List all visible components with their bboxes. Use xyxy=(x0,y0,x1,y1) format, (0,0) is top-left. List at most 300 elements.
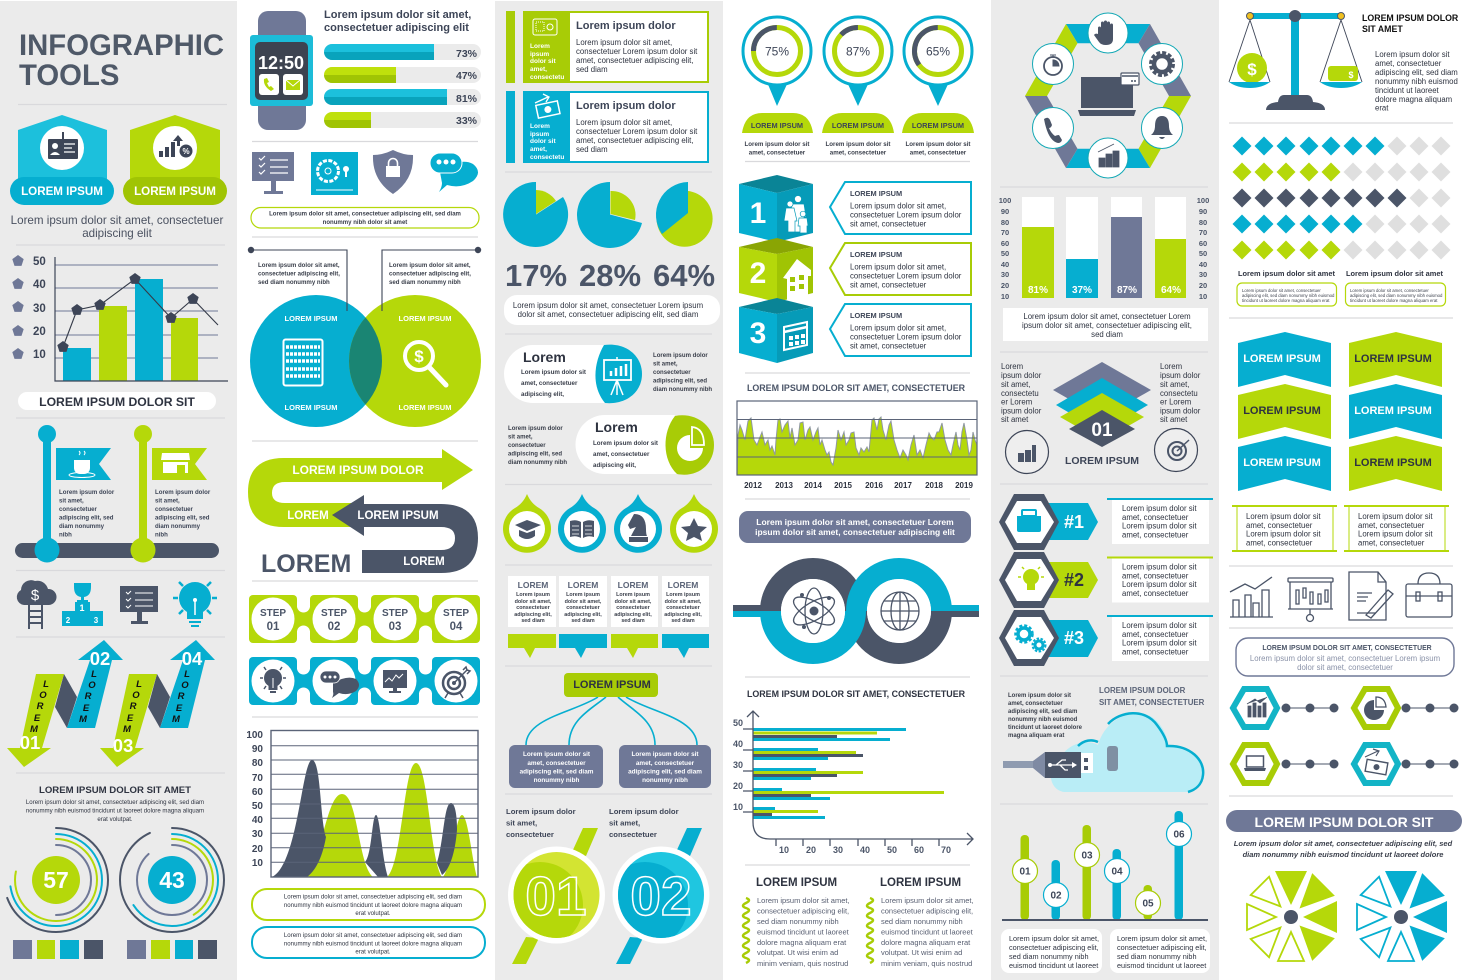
hex node: pie xyxy=(1354,689,1458,727)
hex label 1: amet, consectetuer xyxy=(1122,513,1189,522)
venn diagram: LOREM IPSUM xyxy=(285,403,337,412)
balance scale: $ xyxy=(1348,70,1354,80)
callout 3: sit amet, consectetuer xyxy=(850,342,927,350)
card green xyxy=(506,11,708,83)
callout 2: LOREM IPSUM xyxy=(850,250,902,259)
note cyan: nonummy nibh euismod tincidunt ut laoreet dolore magna aliquam xyxy=(284,940,462,948)
caption: Lorem ipsum dolor sit amet, consectetuer xyxy=(11,214,223,227)
hex label 2: amet, consectetuer xyxy=(1122,572,1189,580)
card cyan: ipsum xyxy=(530,131,549,138)
infinity rings xyxy=(733,568,979,654)
hex label 3: amet, consectetuer xyxy=(1122,630,1189,639)
progress bars: 47% xyxy=(456,70,478,82)
arrows: zigzag steps one and two: L xyxy=(43,679,49,690)
timeline: adipiscing elit, sed xyxy=(155,514,210,522)
text column left xyxy=(743,877,850,968)
balance scale xyxy=(1229,10,1362,110)
note green: Lorem ipsum dolor sit amet, consectetuer adipiscing elit, sed diam xyxy=(284,894,462,900)
step row: 04 xyxy=(450,621,463,633)
text cards: consectetuer xyxy=(566,605,601,611)
column chart: 20 xyxy=(1001,281,1009,290)
layered diamond: consectetu xyxy=(1001,389,1039,398)
title: INFOGRAPHIC xyxy=(19,29,224,62)
column chart: 64% xyxy=(1161,285,1181,296)
timeseries chart: 2018 xyxy=(925,481,943,490)
card green: amet, xyxy=(530,66,547,73)
timeline: consectetuer xyxy=(155,506,194,513)
badge: green growth: LOREM IPSUM xyxy=(134,185,216,198)
column chart: 80 xyxy=(1199,218,1207,227)
text cards: Lorem ipsum xyxy=(566,592,600,598)
text cards: sed diam xyxy=(571,618,595,624)
card green: Lorem ipsum dolor sit amet, xyxy=(576,38,672,47)
text column right: LOREM IPSUM xyxy=(880,877,961,889)
grid notes: adipiscing elit, sed diam nonummy nibh euismod xyxy=(1350,293,1443,298)
horizontal bar chart: 30 xyxy=(733,760,743,770)
callout 2: sit amet, consectetuer xyxy=(850,280,927,290)
title: TOOLS xyxy=(19,59,119,92)
grid notes: adipiscing elit, sed diam nonummy nibh euismod xyxy=(1242,293,1335,298)
timeline: Lorem ipsum dolor xyxy=(59,489,115,496)
scale text: Lorem ipsum dolor sit xyxy=(1375,50,1450,59)
org chart: amet, consectetuer xyxy=(527,760,586,767)
timeline: nibh xyxy=(155,532,168,538)
arrows: zigzag steps three and four: M xyxy=(172,714,181,725)
callout 2 xyxy=(830,243,971,295)
lorem block pie xyxy=(508,415,714,475)
horizontal bar chart: 50 xyxy=(733,718,743,728)
slate banner: Lorem ipsum dolor sit amet, consectetuer Lorem xyxy=(756,517,954,527)
layered diamond: ipsum dolor xyxy=(1001,371,1042,380)
column chart: 37% xyxy=(1072,285,1092,296)
cloud usb: amet, consectetuer xyxy=(1008,701,1063,707)
text cards: LOREM xyxy=(568,580,598,590)
layered diamond: Lorem xyxy=(1160,362,1182,371)
card cyan: Lorem ipsum dolor sit amet, xyxy=(576,118,672,127)
pin 75: LOREM IPSUM xyxy=(751,121,803,130)
ribbon tags xyxy=(1238,332,1442,491)
timeline: diam nonummy xyxy=(155,523,201,530)
text cards: Lorem ipsum xyxy=(516,592,550,598)
callout 1 xyxy=(830,182,971,234)
hex label 1: amet, consectetuer xyxy=(1122,530,1189,540)
layered diamond xyxy=(1001,362,1201,474)
timeseries chart xyxy=(737,401,977,490)
progress heading: Lorem ipsum dolor sit amet, xyxy=(324,9,471,21)
hex label 1: #1 xyxy=(1064,512,1084,532)
badge 02: Lorem ipsum dolor xyxy=(609,807,679,816)
text cards: adipiscing elit, xyxy=(664,612,702,618)
framed note right: amet, consectetuer xyxy=(1358,538,1425,548)
text column left: consectetuer adipiscing elit, xyxy=(757,906,849,916)
grid notes: Lorem ipsum dolor sit amet, consectetuer xyxy=(1350,288,1429,293)
lorem block presentation: adipiscing elit, xyxy=(521,391,564,398)
text column left: sed diam nonummy nibh xyxy=(757,917,839,926)
lorem block pie: consectetuer xyxy=(508,443,546,449)
outlined note: Lorem ipsum dolor sit amet, consectetuer adipiscing elit, sed diam xyxy=(269,212,461,218)
callout 3: Lorem ipsum dolor sit amet, xyxy=(850,324,946,332)
venn diagram xyxy=(248,247,481,427)
outlined title note xyxy=(1236,638,1454,676)
column chart: 40 xyxy=(1199,260,1207,269)
org chart xyxy=(509,673,711,788)
card green: consectetuer Lorem ipsum dolor sit xyxy=(576,47,698,56)
percent values: 28% xyxy=(579,258,641,293)
column chart: 10 xyxy=(1199,292,1207,301)
note cyan: erat volutpat. xyxy=(355,948,391,956)
pie chart 64 xyxy=(656,182,713,247)
hex node: money xyxy=(1354,745,1458,783)
slider chart xyxy=(1002,811,1208,921)
hex label 1: Lorem ipsum dolor sit xyxy=(1122,522,1197,530)
layered diamond: sit amet, xyxy=(1160,380,1189,389)
arrows: zigzag steps one and two: 02 xyxy=(90,648,110,669)
icon: presentation board xyxy=(120,586,158,624)
column chart: 30 xyxy=(1001,270,1009,279)
icon: cloud and ladder xyxy=(17,580,57,629)
hex label 2: amet, consectetuer xyxy=(1122,589,1189,598)
org chart: LOREM IPSUM xyxy=(573,679,651,691)
pin 65: 65% xyxy=(926,44,950,58)
drop: chess knight xyxy=(614,494,662,553)
cube 1 family: 1 xyxy=(750,197,766,230)
percent values xyxy=(505,258,715,293)
ribbon tags: LOREM IPSUM xyxy=(1354,353,1432,365)
slate banner xyxy=(739,511,971,543)
text cards: dolor sit amet, xyxy=(615,599,652,605)
venn diagram: consectetuer adipiscing elit, xyxy=(258,270,340,278)
radial chart 57: 57 xyxy=(43,867,69,893)
bar and line chart: 40 xyxy=(33,279,46,291)
column chart: 10 xyxy=(1001,292,1009,301)
area chart xyxy=(246,730,478,877)
scale text xyxy=(1362,13,1459,112)
outline icon: candlestick board xyxy=(1288,578,1333,622)
note green: nonummy nibh euismod tincidunt ut laoreet dolore magna aliquam xyxy=(284,902,462,909)
slider notes: sed diam nonummy nibh xyxy=(1117,952,1196,961)
radial chart 43: 43 xyxy=(159,867,185,893)
cloud usb xyxy=(1003,686,1205,792)
horizontal bar chart: 10 xyxy=(779,845,789,855)
area chart: 50 xyxy=(252,801,263,812)
step row: 03 xyxy=(389,621,401,633)
icon: podium trophy: 3 xyxy=(94,616,99,625)
cube 3 calendar: 3 xyxy=(750,317,766,350)
progress bars: 73% xyxy=(456,48,478,60)
card green: dolor sit xyxy=(530,58,556,65)
org chart: amet, consectetuer xyxy=(636,760,695,767)
italic description: diam nonummy nibh euismod tincidunt ut laoreet dolore xyxy=(1243,850,1443,859)
icon step row xyxy=(249,657,480,705)
lorem block presentation: amet, consectetuer xyxy=(521,380,578,387)
arrows: zigzag steps one and two: E xyxy=(34,713,41,724)
column chart: 70 xyxy=(1199,228,1207,237)
card cyan: consectetu xyxy=(530,154,564,161)
column chart note xyxy=(1003,308,1208,341)
lorem block presentation: Lorem ipsum dolor sit xyxy=(521,369,586,376)
area chart: 40 xyxy=(252,815,263,826)
horizontal bar chart: 20 xyxy=(733,781,743,791)
column chart note: ipsum dolor sit amet, consectetuer adipiscing elit, xyxy=(1022,321,1192,330)
lorem block pie: Lorem ipsum dolor xyxy=(508,426,563,432)
s-curve dark arrow xyxy=(332,495,478,573)
slider chart: 05 xyxy=(1142,898,1154,910)
hex label 1 xyxy=(999,494,1213,550)
note pill: Lorem ipsum dolor sit amet, consectetuer Lorem ipsum xyxy=(513,301,703,310)
scale text: SIT AMET xyxy=(1362,24,1403,34)
text cards: LOREM xyxy=(668,580,698,590)
area chart: 30 xyxy=(252,829,263,840)
card green: Lorem xyxy=(530,43,550,50)
radial heading text: erat volutpat. xyxy=(97,816,133,823)
org chart: nonummy nibh xyxy=(642,777,688,784)
outlined note xyxy=(251,208,479,228)
framed note left xyxy=(1232,506,1337,551)
radial heading text xyxy=(26,785,204,823)
icon: podium trophy: 2 xyxy=(66,616,71,625)
callout 1: consectetuer Lorem ipsum dolor xyxy=(850,210,962,220)
radial heading text: nonummy nibh euismod tincidunt ut laoreet dolore magna aliquam xyxy=(26,808,204,814)
timeline: nibh xyxy=(59,532,72,538)
horizontal bar chart: 30 xyxy=(833,845,843,855)
grid notes: tincidunt ut laoreet dolore magna aliquam erat xyxy=(1242,298,1330,303)
cube 2 house xyxy=(739,238,813,302)
badge 01: Lorem ipsum dolor xyxy=(506,807,576,816)
lorem block pie: sit amet, xyxy=(508,434,533,440)
text cards: Lorem ipsum xyxy=(666,592,700,598)
badge: cyan id card: LOREM IPSUM xyxy=(21,185,103,198)
venn diagram: $ xyxy=(414,347,424,366)
slider chart: 04 xyxy=(1111,866,1123,878)
area chart: 60 xyxy=(252,787,263,798)
scale text: amet, consectetuer xyxy=(1375,59,1442,68)
framed note right: Lorem ipsum dolor sit xyxy=(1358,530,1433,538)
bar and line chart: 30 xyxy=(33,303,46,315)
framed note left: amet, consectetuer xyxy=(1246,538,1313,548)
text column left: Lorem ipsum dolor sit amet, xyxy=(757,896,850,905)
note green xyxy=(252,889,485,920)
text column left: minim veniam, quis nostrud xyxy=(757,959,848,968)
layered diamond: 01 xyxy=(1091,420,1113,441)
area chart: 100 xyxy=(246,730,263,741)
column chart: 50 xyxy=(1001,249,1009,258)
text cards: consectetuer xyxy=(616,605,651,611)
balance scale: $ xyxy=(1247,60,1257,79)
callout 3 xyxy=(830,304,971,356)
column chart: 90 xyxy=(1199,207,1207,216)
area chart: 90 xyxy=(252,744,263,755)
layered diamond: sit amet xyxy=(1001,415,1029,424)
org chart: nonummy nibh xyxy=(534,777,579,784)
step row: STEP xyxy=(382,608,408,619)
radial heading text: Lorem ipsum dolor sit amet, consectetuer adipiscing elit, sed diam xyxy=(26,799,204,806)
column chart: 60 xyxy=(1001,239,1009,248)
text column right: Lorem ipsum dolor sit amet, xyxy=(881,896,974,905)
drop: graduation cap xyxy=(503,494,551,553)
note green: erat volutpat. xyxy=(355,910,391,917)
arrows: zigzag steps one and two: R xyxy=(85,691,92,702)
pin 65: amet, consectetuer xyxy=(910,150,967,156)
badge 01 xyxy=(497,807,605,964)
hex label 3: Lorem ipsum dolor sit xyxy=(1122,638,1197,648)
lorem block pie: diam nonummy nibh xyxy=(508,460,567,466)
cube 2 house: 2 xyxy=(750,257,766,290)
timeseries chart: 2014 xyxy=(804,481,822,490)
badge 02: consectetuer xyxy=(609,830,657,839)
framed note right: Lorem ipsum dolor sit xyxy=(1358,512,1433,521)
text cards: LOREM xyxy=(618,580,648,590)
arrows: zigzag steps three and four: L xyxy=(136,679,142,690)
horizontal bar chart: 50 xyxy=(887,845,897,855)
column chart: 60 xyxy=(1199,239,1207,248)
lorem block pie: Lorem ipsum dolor sit xyxy=(593,440,658,447)
text column right: volutpat. Ut wisi enim ad xyxy=(881,948,962,957)
pie chart 28 xyxy=(577,182,642,248)
lorem block pie: adipiscing elit, xyxy=(593,462,636,469)
hex label 2: Lorem ipsum dolor sit xyxy=(1122,580,1197,589)
pin 65: Lorem ipsum dolor sit xyxy=(906,141,970,148)
slider notes: euismod tincidunt ut laoreet xyxy=(1117,961,1206,970)
callout 1: LOREM IPSUM xyxy=(850,189,902,198)
card green: Lorem ipsum dolor xyxy=(576,20,676,32)
arrows: zigzag steps three and four: E xyxy=(127,713,134,724)
hex label 2 xyxy=(999,552,1213,608)
text cards: LOREM xyxy=(518,580,548,590)
text column right: consectetuer adipiscing elit, xyxy=(881,906,973,916)
area chart: 70 xyxy=(252,773,263,784)
framed note left: Lorem ipsum dolor sit xyxy=(1246,512,1321,521)
text column right: sed diam nonummy nibh xyxy=(881,917,963,926)
slider chart: 02 xyxy=(1050,890,1062,902)
callout 3: consectetuer Lorem ipsum dolor xyxy=(850,332,962,342)
timeseries chart: 2016 xyxy=(865,481,883,490)
column chart xyxy=(999,196,1209,301)
badge: green growth xyxy=(123,115,227,205)
layered diamond: sit amet xyxy=(1160,415,1188,424)
outlined title note: LOREM IPSUM DOLOR SIT AMET, CONSECTETUER xyxy=(1262,645,1432,652)
card cyan: amet, consectetuer adipiscing elit, xyxy=(576,136,693,145)
text cards: consectetuer xyxy=(666,605,701,611)
venn diagram: LOREM IPSUM xyxy=(285,314,337,323)
pin 65 xyxy=(902,17,974,156)
arrows: zigzag steps three and four: R xyxy=(130,701,137,712)
layered diamond: er Lorem xyxy=(1001,398,1032,406)
icon: shield lock xyxy=(373,150,413,194)
arrows: zigzag steps three and four: L xyxy=(184,669,190,680)
area chart: 10 xyxy=(252,858,263,869)
hex label 3 xyxy=(999,610,1213,666)
cloud usb: adipiscing elit, sed diam xyxy=(1008,709,1077,715)
org chart: adipiscing elit, sed diam xyxy=(628,768,702,776)
bar and line chart xyxy=(12,255,228,381)
pin 75: 75% xyxy=(765,44,789,58)
s-curve dark arrow: LOREM IPSUM xyxy=(357,510,439,522)
percent values: 64% xyxy=(653,258,715,293)
s-curve green arrow: LOREM xyxy=(287,510,329,522)
icon: podium trophy: 1 xyxy=(79,603,85,613)
arrows: zigzag steps one and two: O xyxy=(39,690,47,701)
chart caption pill: LOREM IPSUM DOLOR SIT xyxy=(39,395,195,409)
column chart: 70 xyxy=(1001,228,1009,237)
s-curve green arrow xyxy=(248,449,473,527)
legend swatches xyxy=(13,940,217,959)
outlined title note: dolor sit amet, consectetuer xyxy=(1297,663,1393,672)
arrows: zigzag steps three and four: 04 xyxy=(182,648,203,669)
slider chart: 06 xyxy=(1173,830,1185,840)
column chart: 20 xyxy=(1199,281,1207,290)
venn diagram: consectetuer adipiscing elit, xyxy=(389,270,471,278)
grid notes: Lorem ipsum dolor sit amet xyxy=(1238,269,1335,278)
scale text: erat xyxy=(1375,104,1389,112)
slider notes: consectetuer adipiscing elit, xyxy=(1117,943,1207,952)
radial chart 43 xyxy=(120,828,224,932)
card cyan: Lorem ipsum dolor xyxy=(576,100,676,112)
org chart: adipiscing elit, sed diam xyxy=(520,768,594,776)
column chart: 90 xyxy=(1001,207,1009,216)
text cards: dolor sit amet, xyxy=(565,599,602,605)
text column right xyxy=(867,877,974,968)
smart watch: 12:50 xyxy=(258,53,304,73)
chart caption pill xyxy=(18,392,216,410)
text cards: Lorem ipsum xyxy=(616,592,650,598)
slider notes: Lorem ipsum dolor sit amet, xyxy=(1009,934,1099,943)
ribbon tags: LOREM IPSUM xyxy=(1354,405,1432,417)
lorem block pie: amet, consectetuer xyxy=(593,451,650,458)
arrows: zigzag steps three and four: E xyxy=(176,703,183,714)
horizontal bar chart: 60 xyxy=(914,845,924,855)
bar and line chart: 10 xyxy=(33,349,46,361)
lorem block presentation: sit amet, xyxy=(653,362,678,368)
radial heading text: LOREM IPSUM DOLOR SIT AMET xyxy=(39,785,191,796)
card cyan: amet, xyxy=(530,146,547,153)
text cards: sed diam xyxy=(621,618,645,624)
column chart: 87% xyxy=(1117,285,1137,296)
framed note right xyxy=(1344,506,1449,551)
icon: podium trophy xyxy=(62,583,103,626)
arrows: zigzag steps one and two: 01 xyxy=(20,732,40,753)
ribbon tags: LOREM IPSUM xyxy=(1243,353,1321,365)
progress bars: 33% xyxy=(456,115,478,127)
framed note left: amet, consectetuer xyxy=(1246,521,1313,530)
hex node: laptop xyxy=(1233,745,1338,783)
smart watch xyxy=(250,11,313,130)
callout 3: LOREM IPSUM xyxy=(850,311,902,320)
layered diamond: Lorem xyxy=(1001,362,1023,371)
grid notes: Lorem ipsum dolor sit amet, consectetuer xyxy=(1242,288,1321,293)
badge 02 xyxy=(602,807,710,964)
pin 65: LOREM IPSUM xyxy=(912,121,964,130)
card cyan: sed diam xyxy=(576,145,608,154)
venn diagram: LOREM IPSUM xyxy=(399,314,451,323)
scale text: tincidunt ut laoreet xyxy=(1375,86,1440,95)
drop: open book xyxy=(558,494,606,553)
note cyan xyxy=(252,927,485,958)
badge 01: sit amet, xyxy=(506,818,537,828)
text column left: LOREM IPSUM xyxy=(756,877,837,889)
badge 01: 01 xyxy=(525,865,587,927)
bar chart heading: LOREM IPSUM DOLOR SIT AMET, CONSECTETUER xyxy=(747,689,966,699)
text column left: dolore magna aliquam erat xyxy=(757,938,847,947)
layered diamond: consectetu xyxy=(1160,389,1198,398)
drop: star xyxy=(670,494,718,553)
timeline xyxy=(15,425,219,562)
lorem block presentation: diam nonummy nibh xyxy=(653,387,712,393)
hex label 2: Lorem ipsum dolor sit xyxy=(1122,562,1197,572)
area chart: 80 xyxy=(252,758,263,769)
card green: ipsum xyxy=(530,51,549,58)
icon: light bulb xyxy=(173,582,217,627)
slider notes: euismod tincidunt ut laoreet xyxy=(1009,961,1098,970)
